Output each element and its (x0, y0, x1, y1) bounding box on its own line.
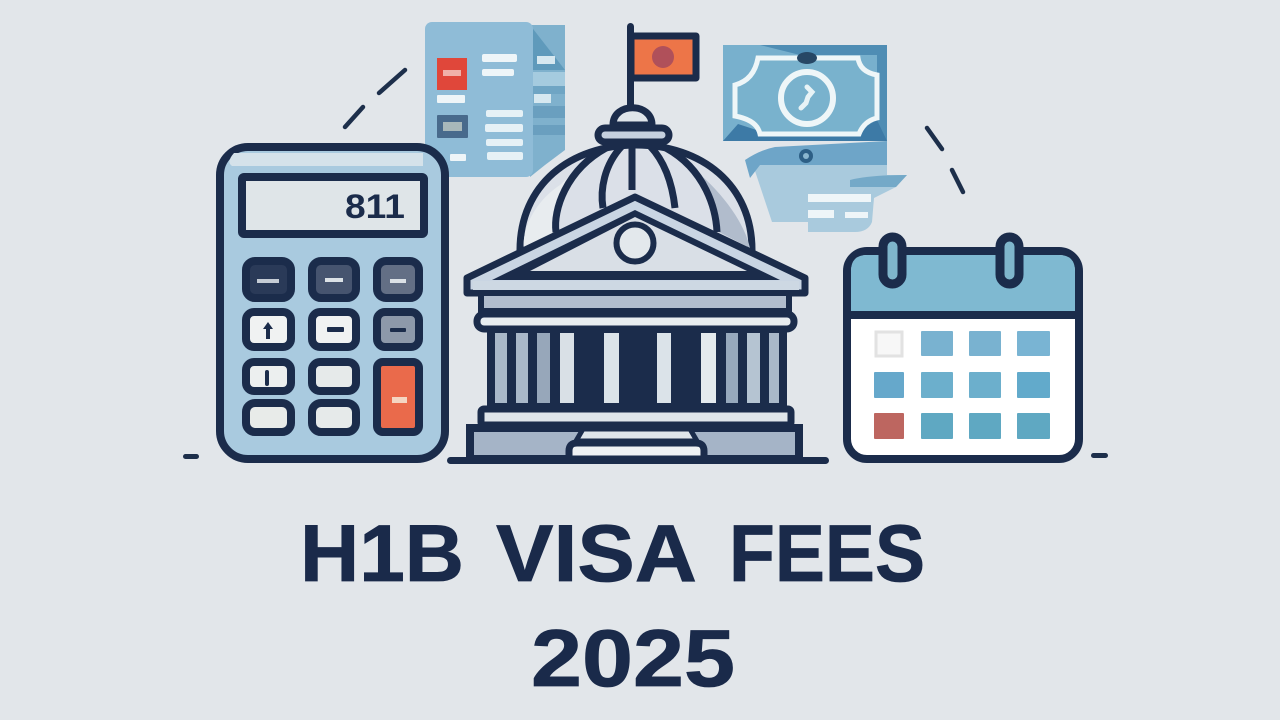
calendar date grid (874, 331, 1050, 439)
dome cap (598, 108, 669, 142)
decorative arc: right dashes (927, 128, 963, 192)
calculator body (220, 147, 445, 459)
pediment (467, 197, 805, 293)
ground dash right (1091, 453, 1108, 458)
calculator key symbols (257, 278, 407, 403)
calendar body (847, 251, 1079, 459)
calendar header (851, 255, 1075, 315)
title: year: 2025 (531, 614, 735, 704)
dome (520, 145, 752, 250)
icon: document floating behind the calculator (425, 22, 565, 177)
icon: calendar (847, 237, 1079, 459)
calculator display (242, 177, 424, 234)
building base (470, 409, 799, 459)
title: H1B visa fees: H1B (300, 509, 464, 599)
decorative arc: left dashes (345, 70, 405, 127)
title: H1B visa fees (300, 509, 925, 599)
calculator display: 811 (345, 188, 405, 226)
icon: government building (447, 23, 829, 464)
icon: calculator (220, 147, 445, 459)
colonnade (487, 332, 787, 406)
entrance steps (569, 429, 704, 459)
ground line (447, 457, 829, 464)
title: H1B visa fees: FEES (729, 509, 925, 599)
title: H1B visa fees: VISA (496, 509, 697, 599)
ground dash left (183, 454, 199, 459)
calculator top highlight (229, 153, 423, 166)
icon: banknote and payment card (723, 45, 907, 232)
entablature (477, 293, 794, 329)
calculator keypad (246, 261, 419, 432)
flag (627, 23, 696, 115)
calendar rings (883, 237, 1019, 284)
